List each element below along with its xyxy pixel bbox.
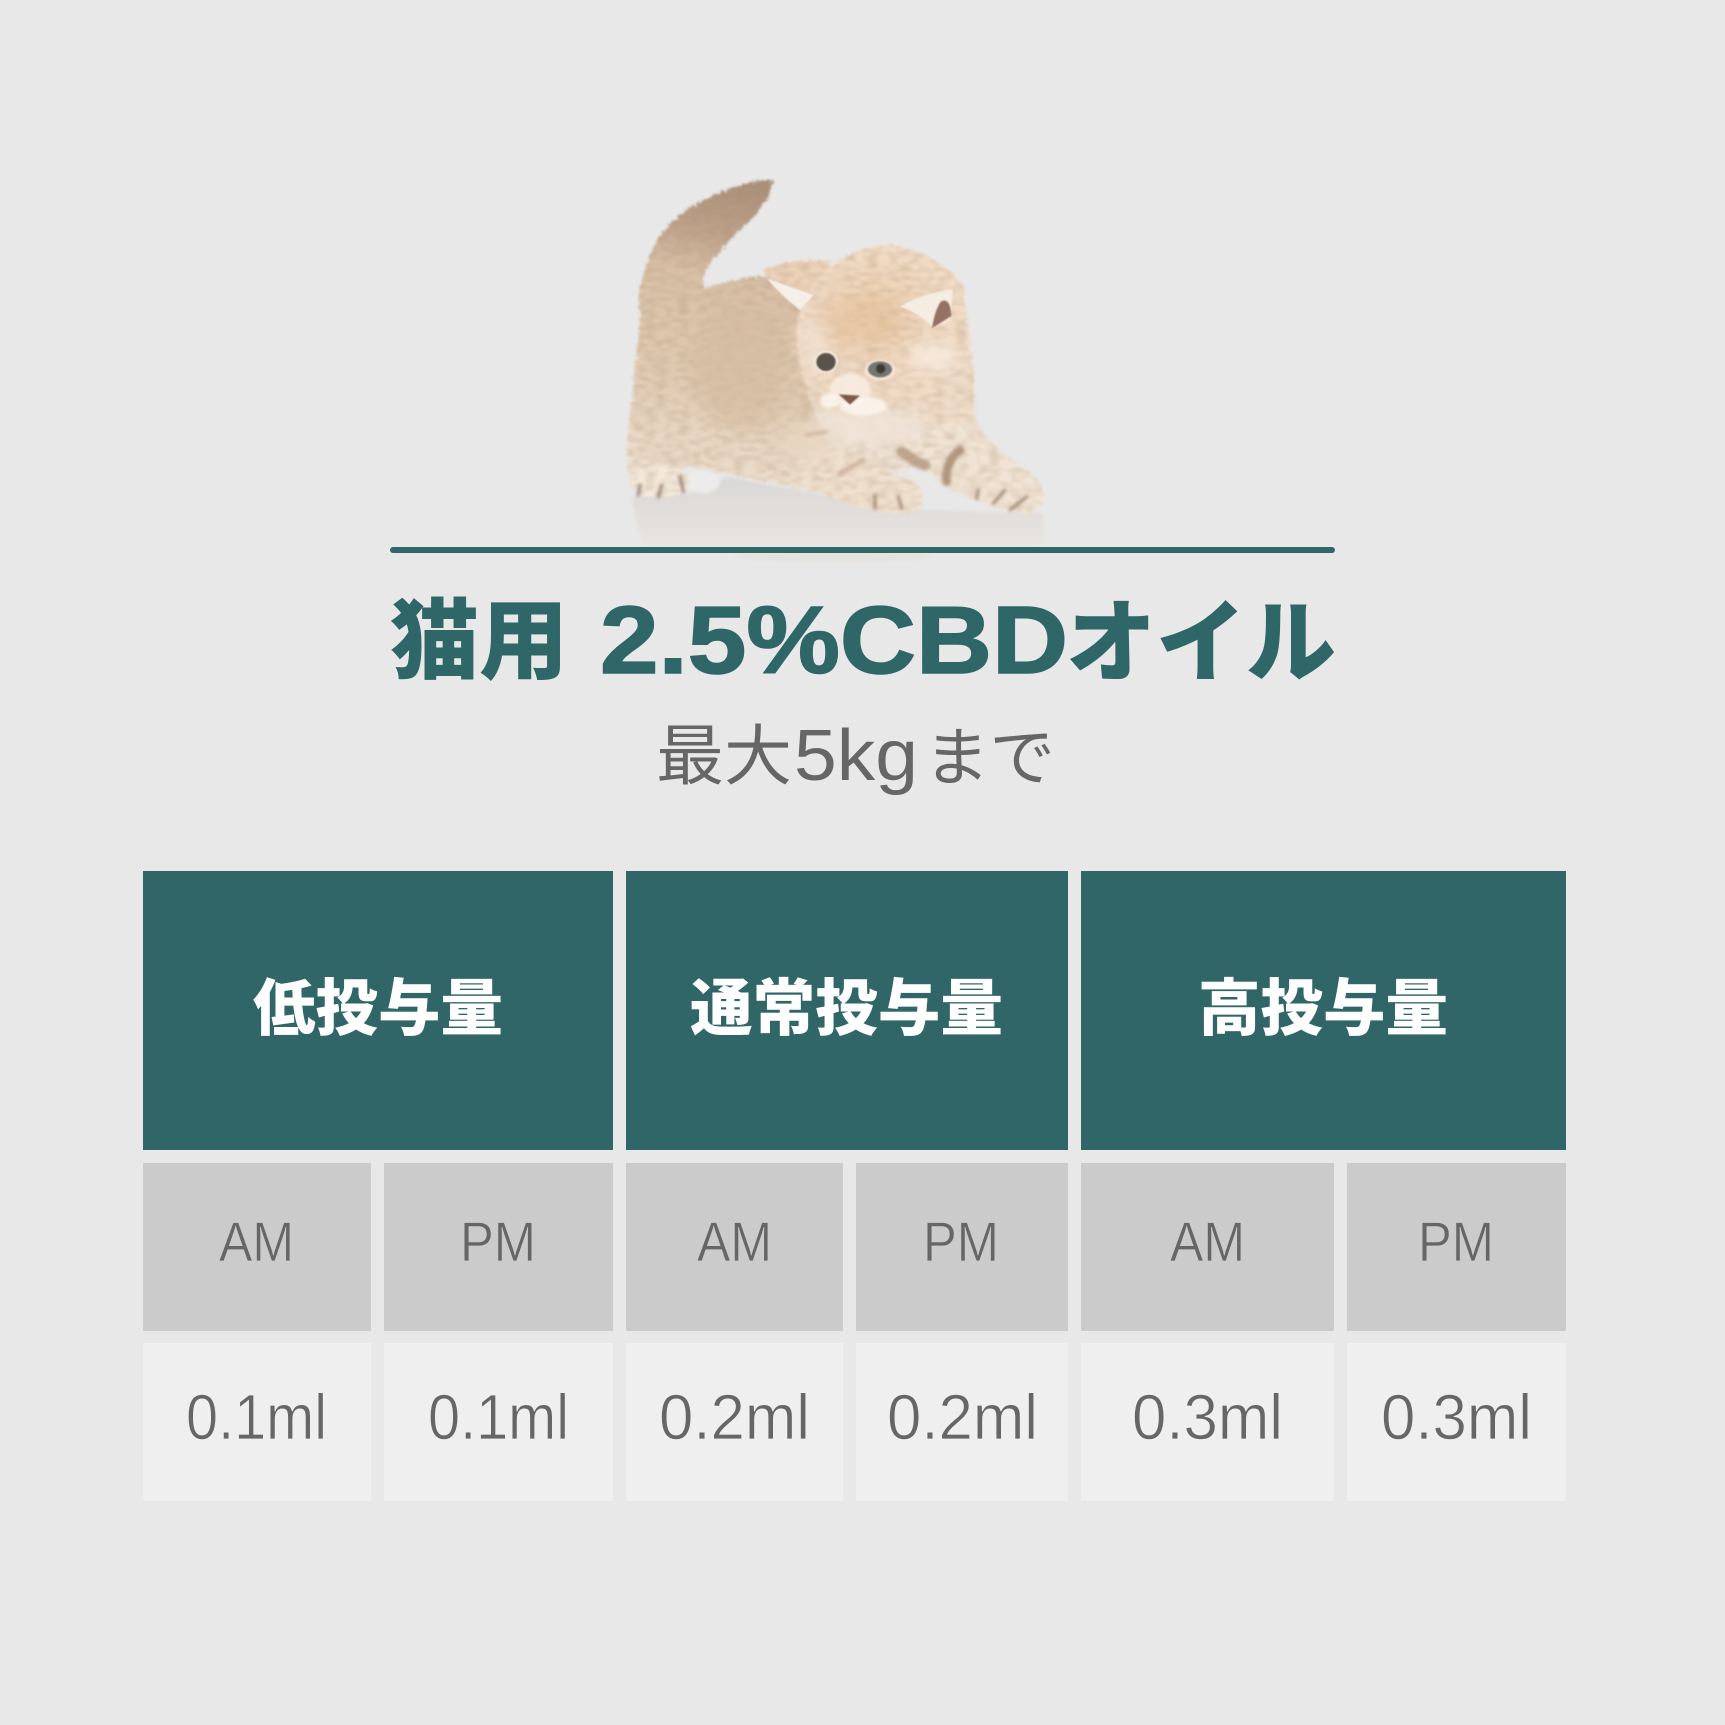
cell: AM amount: 0.1ml: [186, 1381, 327, 1453]
cell: AM amount: 0.2ml: [659, 1381, 810, 1453]
cell: AM amount: 0.3ml: [1132, 1381, 1283, 1453]
title: オイル: [1066, 594, 1336, 694]
subtitle: [656, 716, 1055, 796]
cell: AM label: AM: [219, 1210, 294, 1273]
column: high dose: [1081, 871, 1566, 1501]
cell: PM label: [384, 1163, 613, 1331]
floor reflection: [632, 470, 1043, 562]
cell: AM label: [143, 1163, 371, 1331]
kitten stripes and claws: [638, 432, 1027, 510]
header: normal dose: 通常投与量: [690, 975, 1003, 1044]
kitten inner ear: [932, 301, 951, 328]
cell: PM amount: 0.3ml: [1381, 1381, 1532, 1453]
illustration: kitten: [627, 180, 1043, 562]
kitten fur body: [627, 180, 1043, 514]
cell: AM amount: [1081, 1343, 1334, 1501]
cell: AM amount: [143, 1343, 371, 1501]
column: normal dose: [626, 871, 1068, 1501]
cell: PM amount: [1347, 1343, 1566, 1501]
cell: AM label: AM: [697, 1210, 772, 1273]
cell: PM label: PM: [923, 1210, 999, 1273]
header: normal dose: [626, 871, 1068, 1150]
header: low dose: [143, 871, 613, 1150]
header: high dose: 高投与量: [1198, 975, 1448, 1044]
cell: PM label: [1347, 1163, 1566, 1331]
cell: AM amount: [626, 1343, 843, 1501]
cell: PM amount: [384, 1343, 613, 1501]
title: [390, 587, 1336, 694]
kitten ears: [767, 278, 953, 328]
cell: AM label: [1081, 1163, 1334, 1331]
kitten shading: [697, 297, 960, 463]
column: low dose: [143, 871, 613, 1501]
cell: PM amount: 0.2ml: [887, 1381, 1038, 1453]
title: 猫用: [390, 592, 568, 691]
cell: PM amount: [856, 1343, 1068, 1501]
cell: PM amount: 0.1ml: [428, 1381, 569, 1453]
title: 2.5%CBD: [600, 587, 1068, 694]
subtitle: 5kg: [794, 716, 918, 796]
subtitle: まで: [924, 722, 1055, 794]
cell: PM label: PM: [460, 1210, 536, 1273]
cell: AM label: AM: [1170, 1210, 1245, 1273]
kitten face: [814, 351, 895, 415]
table: dosage: [143, 871, 1566, 1501]
cell: PM label: [856, 1163, 1068, 1331]
header: high dose: [1081, 871, 1566, 1150]
header: low dose: 低投与量: [253, 975, 503, 1044]
cell: PM label: PM: [1418, 1210, 1494, 1273]
subtitle: 最大: [656, 719, 792, 793]
divider line: [390, 547, 1335, 553]
cell: AM label: [626, 1163, 843, 1331]
